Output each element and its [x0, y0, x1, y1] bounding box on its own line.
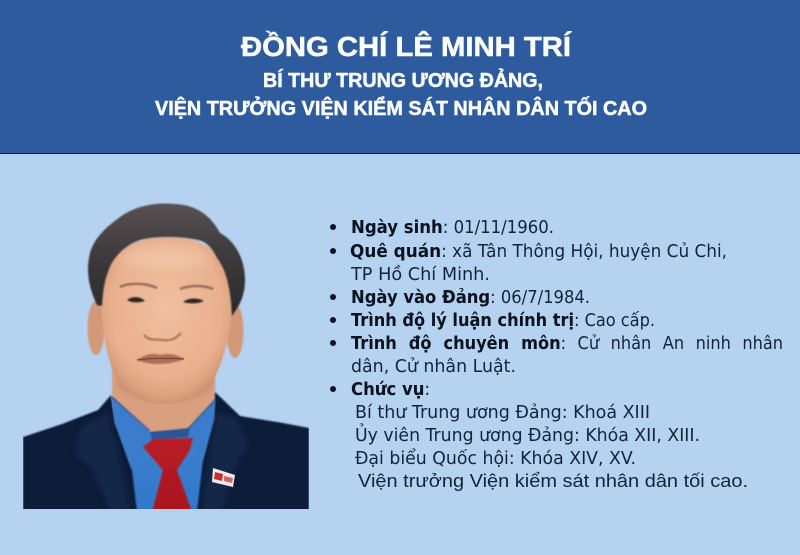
collar shadow: [150, 428, 190, 440]
home town: TP Hồ Chí Minh.: [350, 264, 490, 285]
positions: [351, 379, 748, 491]
party entry date: Ngày vào Đảng: 06/7/1984.: [351, 287, 590, 308]
shirt collar: [112, 397, 215, 470]
collar edge: [112, 397, 215, 431]
ears: [88, 301, 104, 355]
positions: Chức vụ:: [351, 379, 430, 400]
eyebrows: [120, 284, 213, 289]
title: ĐỒNG CHÍ LÊ MINH TRÍ: [241, 31, 572, 62]
professional level: dân, Cử nhân Luật.: [351, 356, 516, 377]
birth date: Ngày sinh: 01/11/1960.: [351, 217, 554, 238]
mouth: [137, 354, 184, 364]
suit jacket: [23, 392, 309, 512]
positions: Đại biểu Quốc hội: Khóa XIV, XV.: [355, 448, 636, 469]
lapel pin: [212, 468, 235, 487]
political theory level: Trình độ lý luận chính trị: Cao cấp.: [351, 310, 655, 331]
neck: [112, 365, 215, 434]
professional level: [351, 333, 783, 377]
bullets: [330, 224, 336, 392]
shirt: [112, 397, 215, 512]
subtitle: BÍ THƯ TRUNG ƯƠNG ĐẢNG,: [263, 69, 543, 92]
face: [101, 237, 231, 404]
positions: Ủy viên Trung ương Đảng: Khóa XII, XIII.: [355, 423, 700, 446]
professional level: Trình độ chuyên môn: Cử nhân An ninh nhân: [351, 333, 783, 354]
home town: [350, 241, 727, 285]
home town: Quê quán: xã Tân Thông Hội, huyện Củ Chi,: [350, 241, 727, 262]
necktie: [143, 438, 193, 512]
nose: [144, 333, 181, 340]
subtitle: [155, 69, 647, 120]
header banner: [0, 0, 800, 154]
positions: Bí thư Trung ương Đảng: Khoá XIII: [355, 402, 650, 423]
lapel shading: [75, 412, 248, 512]
positions: Viện trưởng Viện kiểm sát nhân dân tối cao.: [358, 470, 748, 491]
hair: [88, 204, 245, 316]
face shading: [106, 246, 222, 403]
subtitle: VIỆN TRƯỞNG VIỆN KIỂM SÁT NHÂN DÂN TỐI CAO: [155, 96, 647, 120]
eyes: [127, 297, 204, 303]
biography bullet list: [330, 217, 783, 491]
portrait photo: [23, 204, 309, 512]
